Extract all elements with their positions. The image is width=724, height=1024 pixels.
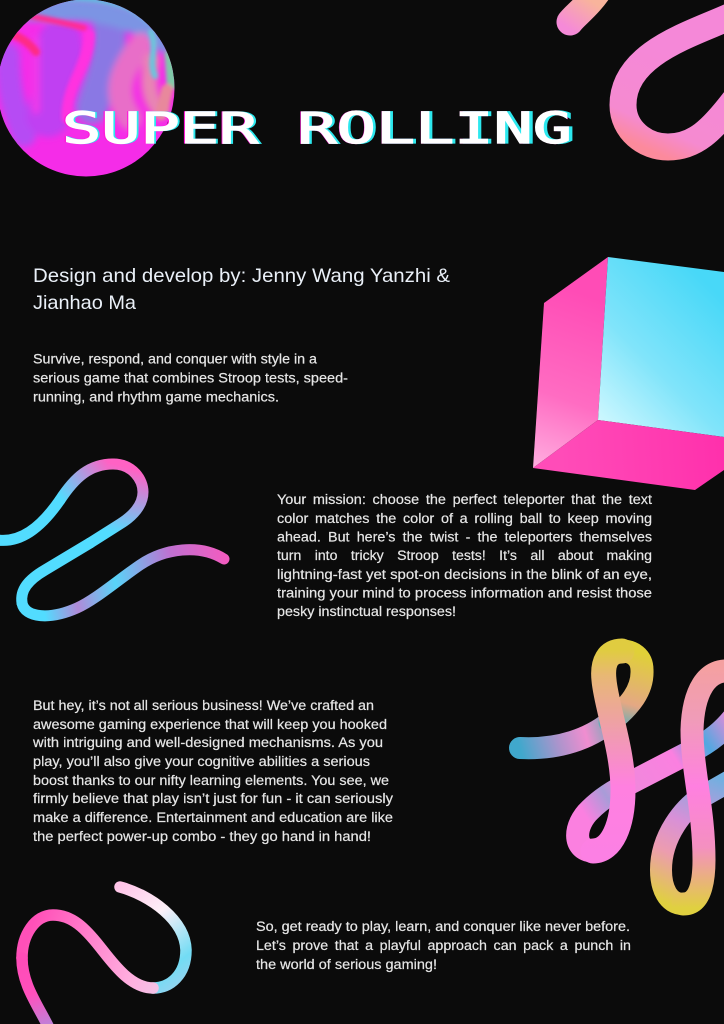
credits heading: Jianhao Ma — [33, 292, 136, 314]
text block: not all serious business: boost thanks to our nifty learning elements. You see, we — [33, 773, 389, 788]
text block: mission: ahead. But here’s the twist - the teleporters themselves — [277, 530, 652, 544]
ribbon: cyan and pink squiggle — [0, 464, 224, 616]
text block: not all serious business: But hey, it’s not all serious business! We’ve crafted an — [33, 698, 374, 713]
title: SUPER ROLLING — [62, 105, 572, 154]
text block: not all serious business: with intriguing and well-designed mechanisms. As you — [32, 735, 383, 750]
text block: mission: color matches the color of a rolling ball to keep moving — [277, 511, 652, 526]
text block: not all serious business: awesome gaming experience that will keep you hooked — [33, 717, 387, 732]
ribbon: top right loop — [570, 0, 724, 147]
text block: intro — [33, 352, 348, 404]
text block: mission: pesky instinctual responses! — [277, 604, 456, 619]
text block: mission: training your mind to process information and resist those — [277, 586, 652, 600]
text block: call to action: So, get ready to play, learn, and conquer like never before. — [256, 919, 630, 934]
credits heading: Design and develop by: Jenny Wang Yanzhi & — [33, 265, 450, 287]
text block: not all serious business: firmly believe that play isn’t just for fun - it can seriously — [33, 791, 393, 806]
text block: call to action: the world of serious gaming! — [256, 957, 437, 972]
text block: intro: running, and rhythm game mechanics. — [33, 390, 279, 404]
title — [60, 105, 576, 154]
text block: intro: Survive, respond, and conquer with style in a — [33, 352, 318, 366]
text block: call to action — [256, 919, 631, 972]
ribbon: interlaced loops — [520, 651, 724, 904]
icon: marbled gradient sphere — [0, 0, 180, 185]
text block: intro: serious game that combines Stroop tests, speed- — [33, 370, 348, 386]
text block: mission: lightning-fast yet spot-on decisions in the blink of an eye, — [277, 567, 652, 582]
credits heading — [33, 265, 450, 314]
icon: 3D gradient cube — [533, 257, 724, 490]
text block: mission: turn into tricky Stroop tests! It’s all about making — [277, 548, 652, 563]
ribbon: bottom left pink and white curve — [22, 887, 186, 1024]
text block: mission — [277, 492, 652, 619]
text block: call to action: Let’s prove that a playful approach can pack a punch in — [256, 938, 631, 953]
title: SUPER ROLLING — [64, 105, 576, 154]
text block: not all serious business: make a difference. Entertainment and education are like — [33, 810, 393, 825]
text block: not all serious business — [32, 698, 393, 844]
text block: not all serious business: play, you’ll also give your cognitive abilities a serious — [33, 754, 370, 769]
text block: mission: Your mission: choose the perfect teleporter that the text — [277, 492, 652, 507]
title: SUPER ROLLING — [60, 105, 572, 154]
text block: not all serious business: the perfect power-up combo - they go hand in hand! — [33, 829, 371, 844]
